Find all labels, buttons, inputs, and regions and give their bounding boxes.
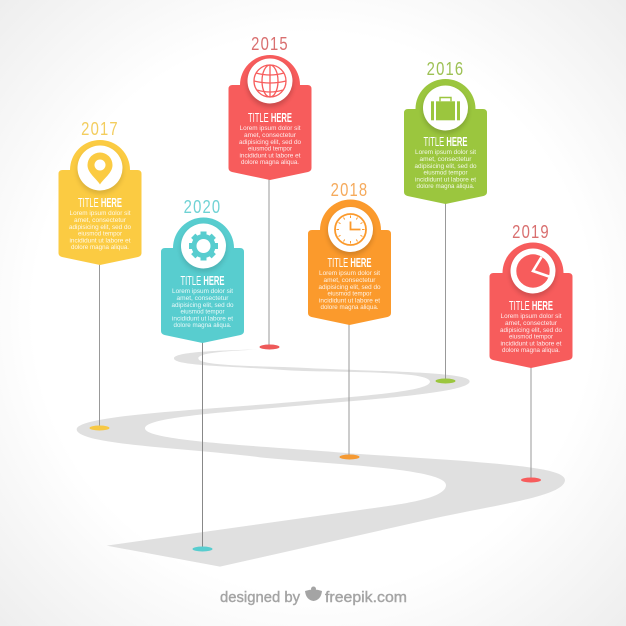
body text: eiusmod tempor: [509, 334, 553, 340]
body text: adipisicing elit, sed do: [318, 284, 381, 291]
body text: dolore magna aliqua.: [416, 183, 475, 190]
body text: dolore magna aliqua.: [71, 244, 129, 251]
body text: Lorem ipsum dolor sit: [319, 270, 380, 277]
title: TITLE HERE: [328, 256, 371, 270]
winding road: [77, 349, 565, 567]
year 2018: 2018: [331, 179, 368, 200]
body text: [172, 288, 234, 329]
marker 2016: pole and base: [436, 203, 456, 384]
marker 2020: pole and base: [192, 342, 212, 552]
body text: Lorem ipsum dolor sit: [415, 149, 476, 156]
panel: 2020: [161, 196, 244, 343]
panel: 2015: [228, 33, 312, 180]
body text: eiusmod tempor: [78, 230, 122, 238]
panel: 2017: [58, 118, 142, 265]
card shape: [490, 243, 572, 368]
marker 2015: pole and base: [260, 178, 280, 350]
body text: amet, consectetur: [244, 132, 296, 139]
body text: [239, 125, 301, 166]
body text: incididunt ut labore et: [500, 340, 562, 348]
icon: location pin: [77, 146, 123, 194]
icon: globe: [247, 58, 293, 107]
body text: amet, consectetur: [505, 320, 557, 327]
card shape: [161, 218, 244, 343]
body text: amet, consectetur: [324, 277, 376, 284]
marker 2019: pole and base: [521, 366, 541, 482]
body text: eiusmod tempor: [180, 308, 224, 316]
icon: freepik mascot: [305, 586, 322, 601]
body text: dolore magna aliqua.: [320, 304, 379, 311]
body text: amet, consectetur: [420, 156, 472, 163]
body text: incididunt ut labore et: [319, 298, 380, 304]
title: TITLE HERE: [509, 299, 553, 313]
body text: amet, consectetur: [74, 217, 126, 224]
body text: dolore magna aliqua.: [241, 159, 299, 166]
body text: [500, 313, 562, 354]
body text: eiusmod tempor: [424, 170, 468, 176]
body text: Lorem ipsum dolor sit: [70, 210, 131, 217]
footer credit: designed by: [220, 590, 301, 606]
body text: Lorem ipsum dolor sit: [172, 288, 233, 295]
card shape: [228, 55, 312, 180]
icon: clock: [328, 207, 374, 256]
body text: incididunt ut labore et: [70, 238, 131, 244]
body text: eiusmod tempor: [248, 146, 292, 152]
body text: dolore magna aliqua.: [502, 347, 560, 354]
year 2017: 2017: [81, 118, 119, 139]
year 2020: 2020: [184, 196, 221, 217]
card shape: [404, 79, 487, 204]
panel: 2016: [404, 58, 487, 204]
body text: Lorem ipsum dolor sit: [240, 125, 301, 132]
body text: [414, 149, 477, 190]
body text: Lorem ipsum dolor sit: [501, 313, 562, 320]
body text: dolore magna aliqua.: [174, 322, 232, 329]
title: TITLE HERE: [424, 135, 467, 149]
body text: [318, 270, 381, 311]
body text: adipisicing elit, sed do: [500, 327, 562, 334]
body text: [69, 210, 131, 251]
icon: briefcase: [422, 86, 468, 134]
body text: adipisicing elit, sed do: [69, 224, 131, 231]
footer credit: freepik.com: [325, 590, 407, 606]
body text: incididunt ut labore et: [415, 176, 476, 184]
body text: adipisicing elit, sed do: [239, 139, 301, 146]
body text: adipisicing elit, sed do: [171, 302, 234, 309]
title: TITLE HERE: [181, 274, 224, 288]
marker 2017: pole and base: [90, 263, 110, 430]
title: TITLE HERE: [248, 111, 292, 125]
year 2019: 2019: [512, 221, 550, 242]
year 2016: 2016: [427, 58, 464, 79]
icon: pie chart: [510, 248, 556, 297]
panel: 2019: [490, 221, 572, 368]
body text: amet, consectetur: [176, 295, 228, 302]
year 2015: 2015: [251, 33, 289, 54]
card shape: [58, 140, 142, 265]
body text: eiusmod tempor: [328, 290, 372, 298]
footer credit: [220, 586, 407, 606]
marker 2018: pole and base: [340, 322, 360, 460]
icon: gear: [180, 224, 226, 272]
card shape: [308, 200, 391, 325]
body text: incididunt ut labore et: [240, 152, 301, 160]
body text: incididunt ut labore et: [172, 316, 233, 322]
panel: 2018: [308, 179, 391, 325]
title: TITLE HERE: [78, 196, 122, 210]
body text: adipisicing elit, sed do: [414, 163, 477, 170]
